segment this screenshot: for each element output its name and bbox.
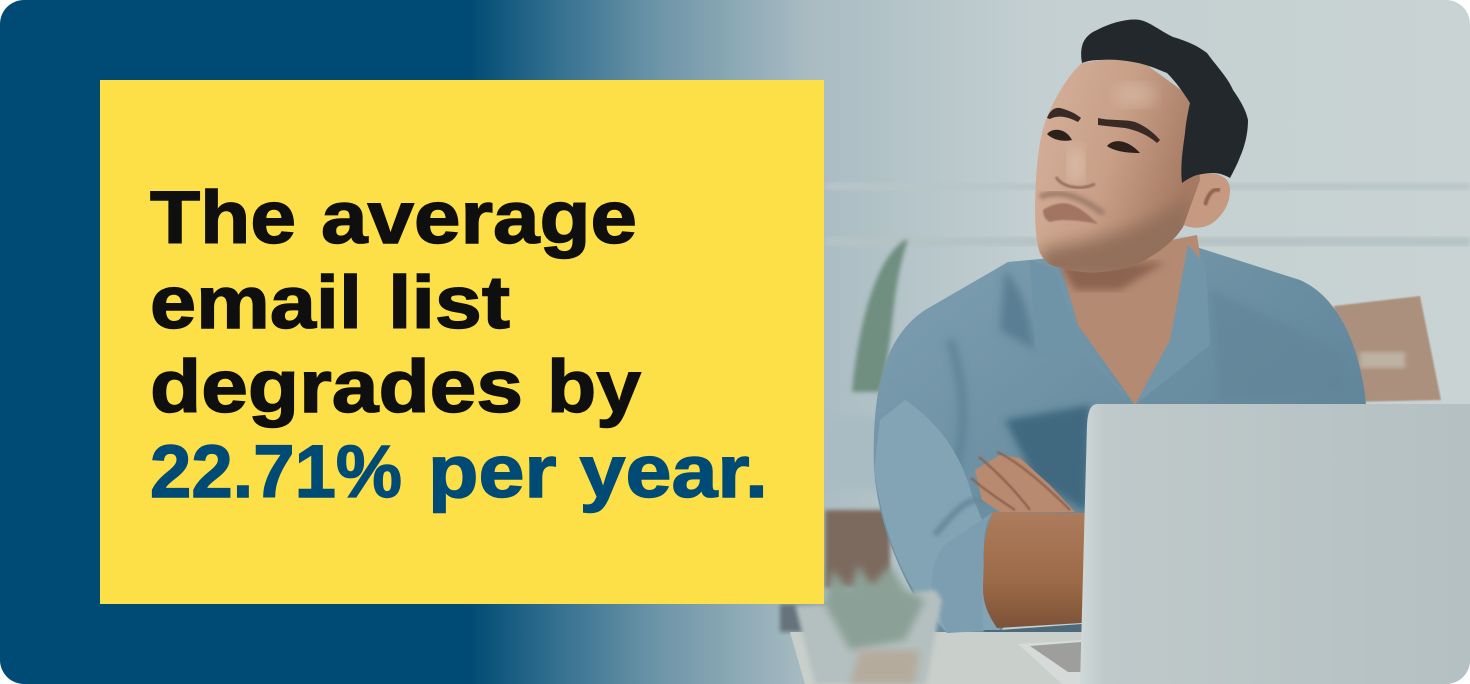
hand <box>971 452 1075 512</box>
hair <box>1081 19 1248 183</box>
forearm <box>983 512 1087 628</box>
yellow callout panel <box>100 80 824 604</box>
headline text: email <box>150 261 362 344</box>
folded sleeve <box>874 400 1000 633</box>
collar <box>1030 260 1135 405</box>
headline text: by <box>547 345 641 428</box>
shirt <box>874 245 1366 632</box>
headline text <box>150 176 768 513</box>
ear <box>1183 173 1230 228</box>
photo: man with crossed arms <box>874 19 1366 633</box>
mouth <box>1043 203 1098 224</box>
face <box>1035 55 1200 272</box>
eyes <box>1047 130 1072 141</box>
neck <box>1060 235 1205 405</box>
headline text: list <box>388 261 510 344</box>
headline text: 22.71% <box>150 430 402 513</box>
headline text: The <box>150 176 296 259</box>
shirt shading <box>946 273 1224 512</box>
headline text: average <box>321 176 637 259</box>
photo: laptop <box>1018 404 1470 684</box>
eyebrows <box>1047 108 1160 143</box>
headline text: per year. <box>428 430 768 513</box>
headline text: degrades <box>150 345 523 428</box>
face shading <box>1040 83 1190 280</box>
photo: office wall and furniture <box>780 183 1470 684</box>
photo: succulent plant in pot <box>795 565 942 684</box>
nose <box>1056 177 1095 188</box>
